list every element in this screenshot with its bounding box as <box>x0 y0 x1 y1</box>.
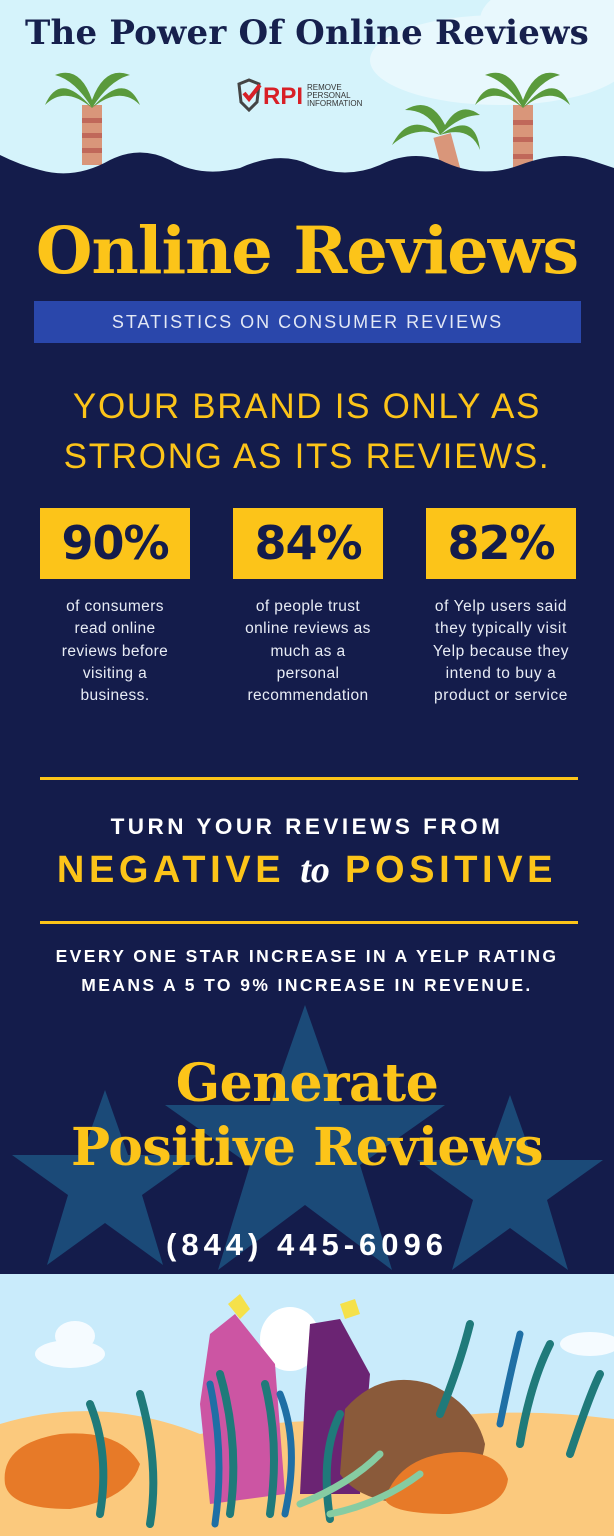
text: turn your reviews: TURN YOUR REVIEWS FROM <box>111 814 503 839</box>
logo: PERSONAL <box>307 91 351 100</box>
banner: statistics <box>34 301 581 343</box>
heading: Online Reviews: Online Reviews <box>36 213 578 289</box>
text: revenue stat: MEANS A 5 TO 9% INCREASE IN REVENUE. <box>81 975 533 995</box>
stat 2: 84% <box>254 516 362 570</box>
banner: statistics: STATISTICS ON CONSUMER REVIEWS <box>112 312 503 332</box>
icon: palm tree left <box>45 73 140 165</box>
heading: negative to positive: NEGATIVE to POSITIVE <box>57 849 557 891</box>
icon: palm trees right <box>392 73 570 176</box>
logo: REMOVE <box>307 83 342 92</box>
heading: generate positive reviews: Generate <box>176 1053 438 1114</box>
text: revenue stat: EVERY ONE STAR INCREASE IN A YELP RATING <box>56 946 558 966</box>
stat 1 <box>40 508 190 704</box>
text: revenue stat <box>56 946 558 995</box>
stat 3: 82% <box>447 516 555 570</box>
illustration: seabed <box>0 1274 614 1536</box>
stat 3: of Yelp users said they typically visit Yelp because they intend to buy a product or service <box>433 598 569 704</box>
title: The Power Of Online Reviews <box>25 13 589 53</box>
phone: (844) 445-6096 <box>166 1227 448 1262</box>
stat 2 <box>233 508 383 704</box>
subheading: STRONG AS ITS REVIEWS. <box>64 437 550 476</box>
heading: generate positive reviews: Positive Reviews <box>71 1117 543 1178</box>
subheading: YOUR BRAND IS ONLY AS <box>73 387 541 426</box>
stat 1: of consumers read online reviews before visiting a business. <box>62 598 168 704</box>
logo: INFORMATION <box>307 99 363 108</box>
stat 3 <box>426 508 576 704</box>
header sky <box>0 0 614 200</box>
wave <box>0 152 614 200</box>
subheading <box>64 387 550 476</box>
stat 1: 90% <box>61 516 169 570</box>
logo <box>237 78 363 112</box>
icon: background stars <box>12 1006 603 1270</box>
icon: cloud <box>370 0 614 105</box>
stat 2: of people trust online reviews as much as a personal recommendation <box>245 598 371 704</box>
heading: generate positive reviews <box>71 1053 543 1178</box>
logo: RPI <box>263 83 303 110</box>
